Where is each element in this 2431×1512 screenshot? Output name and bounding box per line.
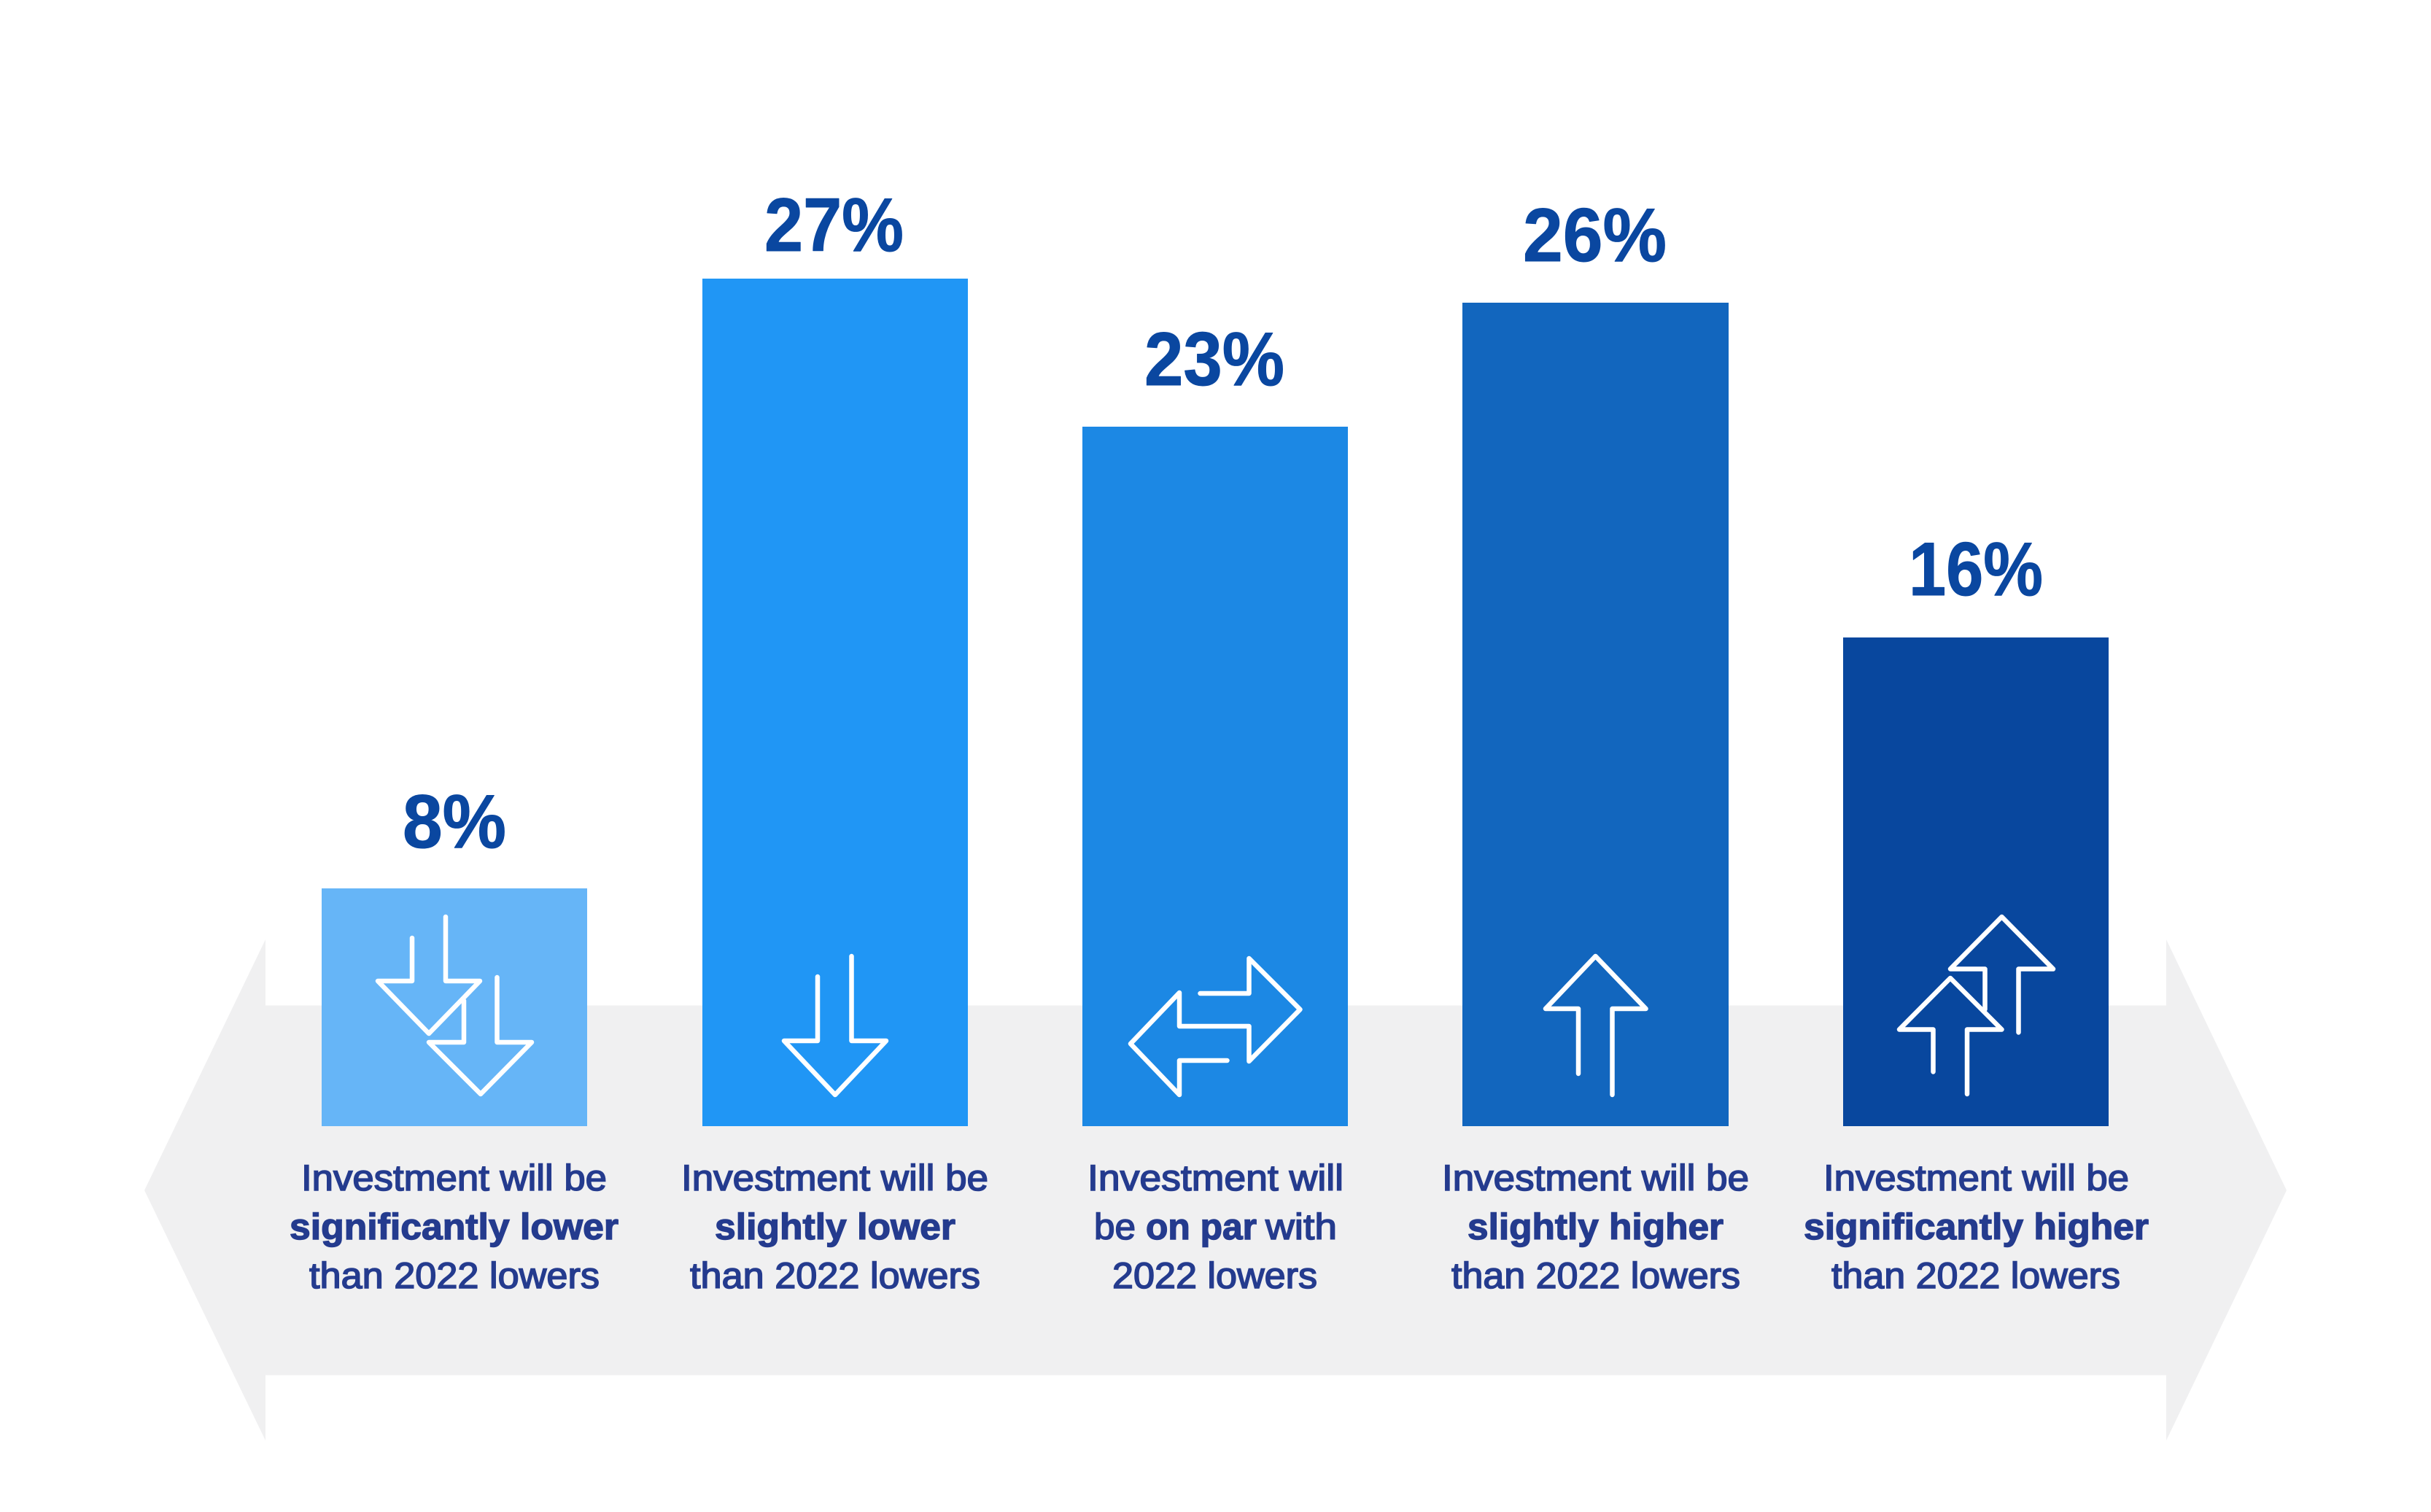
column: significantly lower	[290, 780, 619, 1296]
value: 8%: 8%	[403, 780, 506, 864]
label: slightly lower: than 2022 lowers	[690, 1255, 980, 1296]
label: significantly lower: than 2022 lowers	[309, 1255, 600, 1296]
value: 26%: 26%	[1523, 193, 1667, 278]
value: 23%: 23%	[1144, 317, 1284, 402]
column: slightly lower	[681, 183, 988, 1296]
bar: 27%	[702, 279, 968, 1126]
label: slightly lower: Investment will be	[681, 1158, 988, 1198]
label: slightly higher: Investment will be	[1442, 1158, 1749, 1198]
label: on par	[1087, 1158, 1344, 1296]
label: slightly lower: slightly lower	[715, 1206, 955, 1247]
label: on par: 2022 lowers	[1112, 1255, 1317, 1296]
label: on par: be	[1094, 1206, 1136, 1247]
label: on par: with	[1265, 1206, 1337, 1247]
icon: up arrow	[1546, 956, 1645, 1095]
bar: 16%	[1843, 637, 2109, 1126]
bar: 23%	[1082, 427, 1348, 1126]
label: significantly higher	[1804, 1158, 2149, 1296]
label: slightly higher: slightly higher	[1467, 1206, 1724, 1247]
label: significantly higher: significantly higher	[1804, 1206, 2149, 1247]
value: 27%: 27%	[764, 183, 904, 268]
label: slightly lower	[681, 1158, 988, 1296]
background double-headed arrow	[144, 939, 2287, 1441]
label: slightly higher: than 2022 lowers	[1451, 1255, 1740, 1296]
column: significantly higher	[1804, 527, 2149, 1296]
label: significantly lower: significantly lower	[290, 1206, 619, 1247]
column: slightly higher	[1442, 193, 1749, 1296]
label: on par: on par	[1146, 1206, 1257, 1247]
value: 16%: 16%	[1909, 527, 2043, 612]
icon: down arrow	[784, 956, 886, 1095]
icon: left and right arrows	[1131, 958, 1300, 1095]
label: significantly lower	[290, 1158, 619, 1296]
bar: 26%	[1462, 303, 1729, 1126]
label: slightly higher	[1442, 1158, 1749, 1296]
bar: 8%	[322, 888, 587, 1126]
label: significantly lower: Investment will be	[301, 1158, 607, 1198]
label: significantly higher: than 2022 lowers	[1831, 1255, 2120, 1296]
column: on par	[1082, 317, 1348, 1296]
icon: two down arrows	[378, 917, 532, 1094]
label: on par: Investment will	[1087, 1158, 1344, 1198]
icon: two up arrows	[1899, 917, 2053, 1094]
label: significantly higher: Investment will be	[1823, 1158, 2129, 1198]
